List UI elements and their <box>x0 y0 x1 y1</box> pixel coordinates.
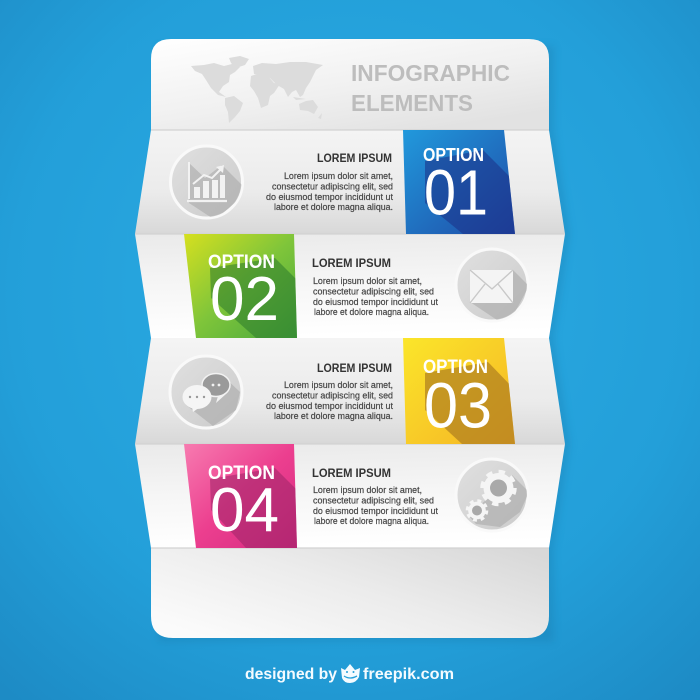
option label 04: OPTION <box>208 462 275 484</box>
text block 2: do eiusmod tempor incididunt ut <box>313 297 438 307</box>
icon: envelope <box>456 249 529 322</box>
footer credit <box>245 664 454 683</box>
text block 1: LOREM IPSUM <box>317 153 392 165</box>
text block 3: consectetur adipiscing elit, sed <box>272 390 393 400</box>
title <box>351 60 510 116</box>
option label 02: OPTION <box>208 251 275 273</box>
panel: row 1 fold <box>135 130 565 234</box>
title: ELEMENTS <box>351 90 473 116</box>
folded paper panel <box>135 39 565 638</box>
option 02 tab <box>184 234 297 338</box>
text block 1 <box>266 153 393 212</box>
text block 4: labore et dolore magna aliqua. <box>314 516 429 526</box>
long shadow 01 <box>425 150 516 234</box>
text block 2 <box>312 258 438 317</box>
text block 3: LOREM IPSUM <box>317 363 392 375</box>
number 03: 03 <box>424 370 492 442</box>
text block 1: consectetur adipiscing elit, sed <box>272 182 393 192</box>
text block 1: Lorem ipsum dolor sit amet, <box>284 171 393 181</box>
option label 03: OPTION <box>423 356 488 378</box>
icon: growth chart <box>170 146 243 220</box>
text block 3: do eiusmod tempor incididunt ut <box>266 401 393 411</box>
text block 1: do eiusmod tempor incididunt ut <box>266 192 393 202</box>
icon: gears <box>456 459 529 531</box>
option label 01: OPTION <box>423 144 484 165</box>
number 01: 01 <box>424 156 488 228</box>
number 02: 02 <box>210 265 279 334</box>
long shadow 03 <box>425 362 515 444</box>
panel: bottom fold <box>151 548 549 638</box>
icon: freepik logo <box>341 664 360 683</box>
panel: row 3 fold <box>135 338 565 444</box>
option 01 tab <box>403 130 516 234</box>
footer credit: designed by <box>245 666 337 683</box>
option 03 tab <box>403 338 515 444</box>
text block 1: labore et dolore magna aliqua. <box>274 202 393 212</box>
text block 4: Lorem ipsum dolor sit amet, <box>313 485 422 495</box>
text block 3: Lorem ipsum dolor sit amet, <box>284 380 393 390</box>
text block 2: Lorem ipsum dolor sit amet, <box>313 276 422 286</box>
panel: top header fold <box>151 39 549 130</box>
text block 3 <box>266 363 393 421</box>
text block 4: LOREM IPSUM <box>312 468 391 480</box>
paper shadow <box>142 46 570 642</box>
panel: row 2 fold <box>135 234 565 338</box>
world map <box>191 56 323 123</box>
icon: speech bubbles <box>170 356 242 428</box>
number 04: 04 <box>210 476 279 545</box>
footer credit: freepik.com <box>363 666 454 683</box>
text block 3: labore et dolore magna aliqua. <box>274 411 393 421</box>
long shadow 04 <box>210 468 297 548</box>
text block 4: consectetur adipiscing elit, sed <box>313 496 434 506</box>
option 04 tab <box>184 444 297 548</box>
text block 4 <box>312 468 438 526</box>
long shadow 02 <box>210 258 297 338</box>
title: INFOGRAPHIC <box>351 60 510 86</box>
text block 2: LOREM IPSUM <box>312 258 391 270</box>
panel: row 4 fold <box>135 444 565 548</box>
text block 2: consectetur adipiscing elit, sed <box>313 286 434 296</box>
text block 2: labore et dolore magna aliqua. <box>314 307 429 317</box>
text block 4: do eiusmod tempor incididunt ut <box>313 506 438 516</box>
